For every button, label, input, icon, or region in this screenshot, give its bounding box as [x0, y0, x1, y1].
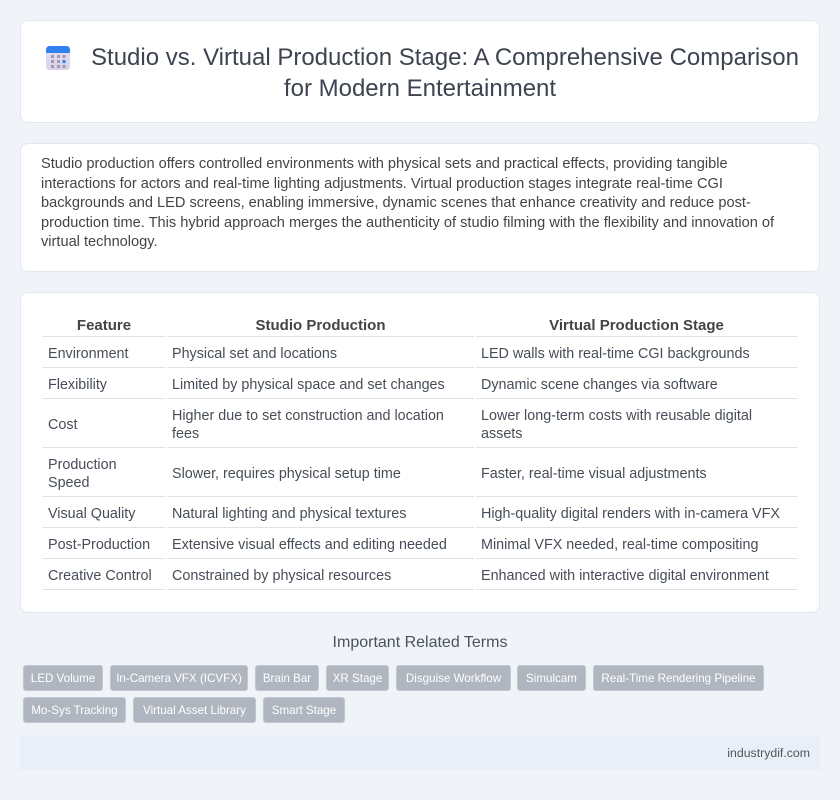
tag: [110, 665, 248, 691]
tag: [133, 697, 256, 723]
tag: [23, 665, 103, 691]
text block: intro paragraph: backgrounds and LED screens, enabling immersive, dynamic scenes that enhance creativity and reduce post-: [41, 195, 751, 211]
comparison table: Constrained by physical resources: [172, 568, 391, 584]
tag: [23, 697, 126, 723]
tag: [263, 697, 345, 723]
tag: [593, 665, 764, 691]
tag: In-Camera VFX (ICVFX): [116, 672, 242, 685]
tag: Smart Stage: [272, 704, 336, 717]
footer bar: [20, 736, 820, 770]
row: flexibility: Flexibility: [48, 377, 107, 393]
heading: related terms: Important Related Terms: [333, 634, 507, 651]
row: creative control: Creative Control: [48, 568, 152, 584]
row: production speed: Speed: [48, 475, 89, 491]
row: post-production: Post-Production: [48, 537, 150, 553]
row: production speed: Production: [48, 457, 117, 473]
text block: intro paragraph: virtual technology.: [41, 234, 158, 250]
tag: [255, 665, 319, 691]
comparison table: Limited by physical space and set changes: [172, 377, 445, 393]
comparison table: Minimal VFX needed, real-time compositing: [481, 537, 758, 553]
comparison table: Natural lighting and physical textures: [172, 506, 406, 522]
row: environment: Environment: [48, 346, 129, 362]
comparison table: Lower long-term costs with reusable digital: [481, 408, 752, 424]
tag: Simulcam: [526, 672, 577, 685]
tag: Mo-Sys Tracking: [31, 704, 118, 717]
tag: LED Volume: [31, 672, 95, 685]
comparison table: Enhanced with interactive digital environment: [481, 568, 769, 584]
comparison table: fees: [172, 426, 199, 442]
row: cost: Cost: [48, 417, 78, 433]
text block: intro paragraph: Studio production offers controlled environments with physical sets and practical effects, providing tangible: [41, 156, 728, 172]
title: Studio vs. Virtual Production Stage: A Comprehensive Comparison: [91, 44, 799, 71]
comparison table: Dynamic scene changes via software: [481, 377, 718, 393]
header: studio production: Studio Production: [256, 317, 385, 334]
tag: [396, 665, 511, 691]
comparison table: [43, 317, 797, 590]
comparison table: Slower, requires physical setup time: [172, 466, 401, 482]
text block: intro paragraph: [41, 156, 774, 250]
title: for Modern Entertainment: [284, 75, 556, 102]
comparison table: Higher due to set construction and location: [172, 408, 444, 424]
comparison table: assets: [481, 426, 522, 442]
panel: intro: [20, 143, 820, 272]
tag list: related terms: [23, 665, 764, 723]
panel: header: [20, 20, 820, 123]
comparison table: High-quality digital renders with in-camera VFX: [481, 506, 780, 522]
tag: Brain Bar: [263, 672, 311, 685]
comparison table: LED walls with real-time CGI backgrounds: [481, 346, 750, 362]
panel: comparison table: [20, 292, 820, 613]
icon: calendar: [46, 46, 70, 70]
comparison table: Physical set and locations: [172, 346, 337, 362]
row: production speed: [48, 457, 117, 491]
tag: [517, 665, 586, 691]
text block: intro paragraph: production time. This hybrid approach merges the authenticity of studio filming with the flexibility and innovation of: [41, 215, 774, 231]
footer source text: industrydif.com: [727, 746, 810, 760]
comparison table: Faster, real-time visual adjustments: [481, 466, 707, 482]
title: [91, 44, 799, 102]
header: feature: Feature: [77, 317, 131, 334]
tag: Disguise Workflow: [406, 672, 501, 685]
row: visual quality: Visual Quality: [48, 506, 135, 522]
tag: Real-Time Rendering Pipeline: [601, 672, 756, 685]
header: virtual production stage: Virtual Production Stage: [549, 317, 724, 334]
tag: XR Stage: [333, 672, 382, 685]
text block: intro paragraph: interactions for actors and real-time lighting adjustments. Virtual production stages integrate real-time CGI: [41, 176, 723, 192]
comparison table: Extensive visual effects and editing needed: [172, 537, 447, 553]
tag: [326, 665, 389, 691]
tag: Virtual Asset Library: [143, 704, 246, 717]
